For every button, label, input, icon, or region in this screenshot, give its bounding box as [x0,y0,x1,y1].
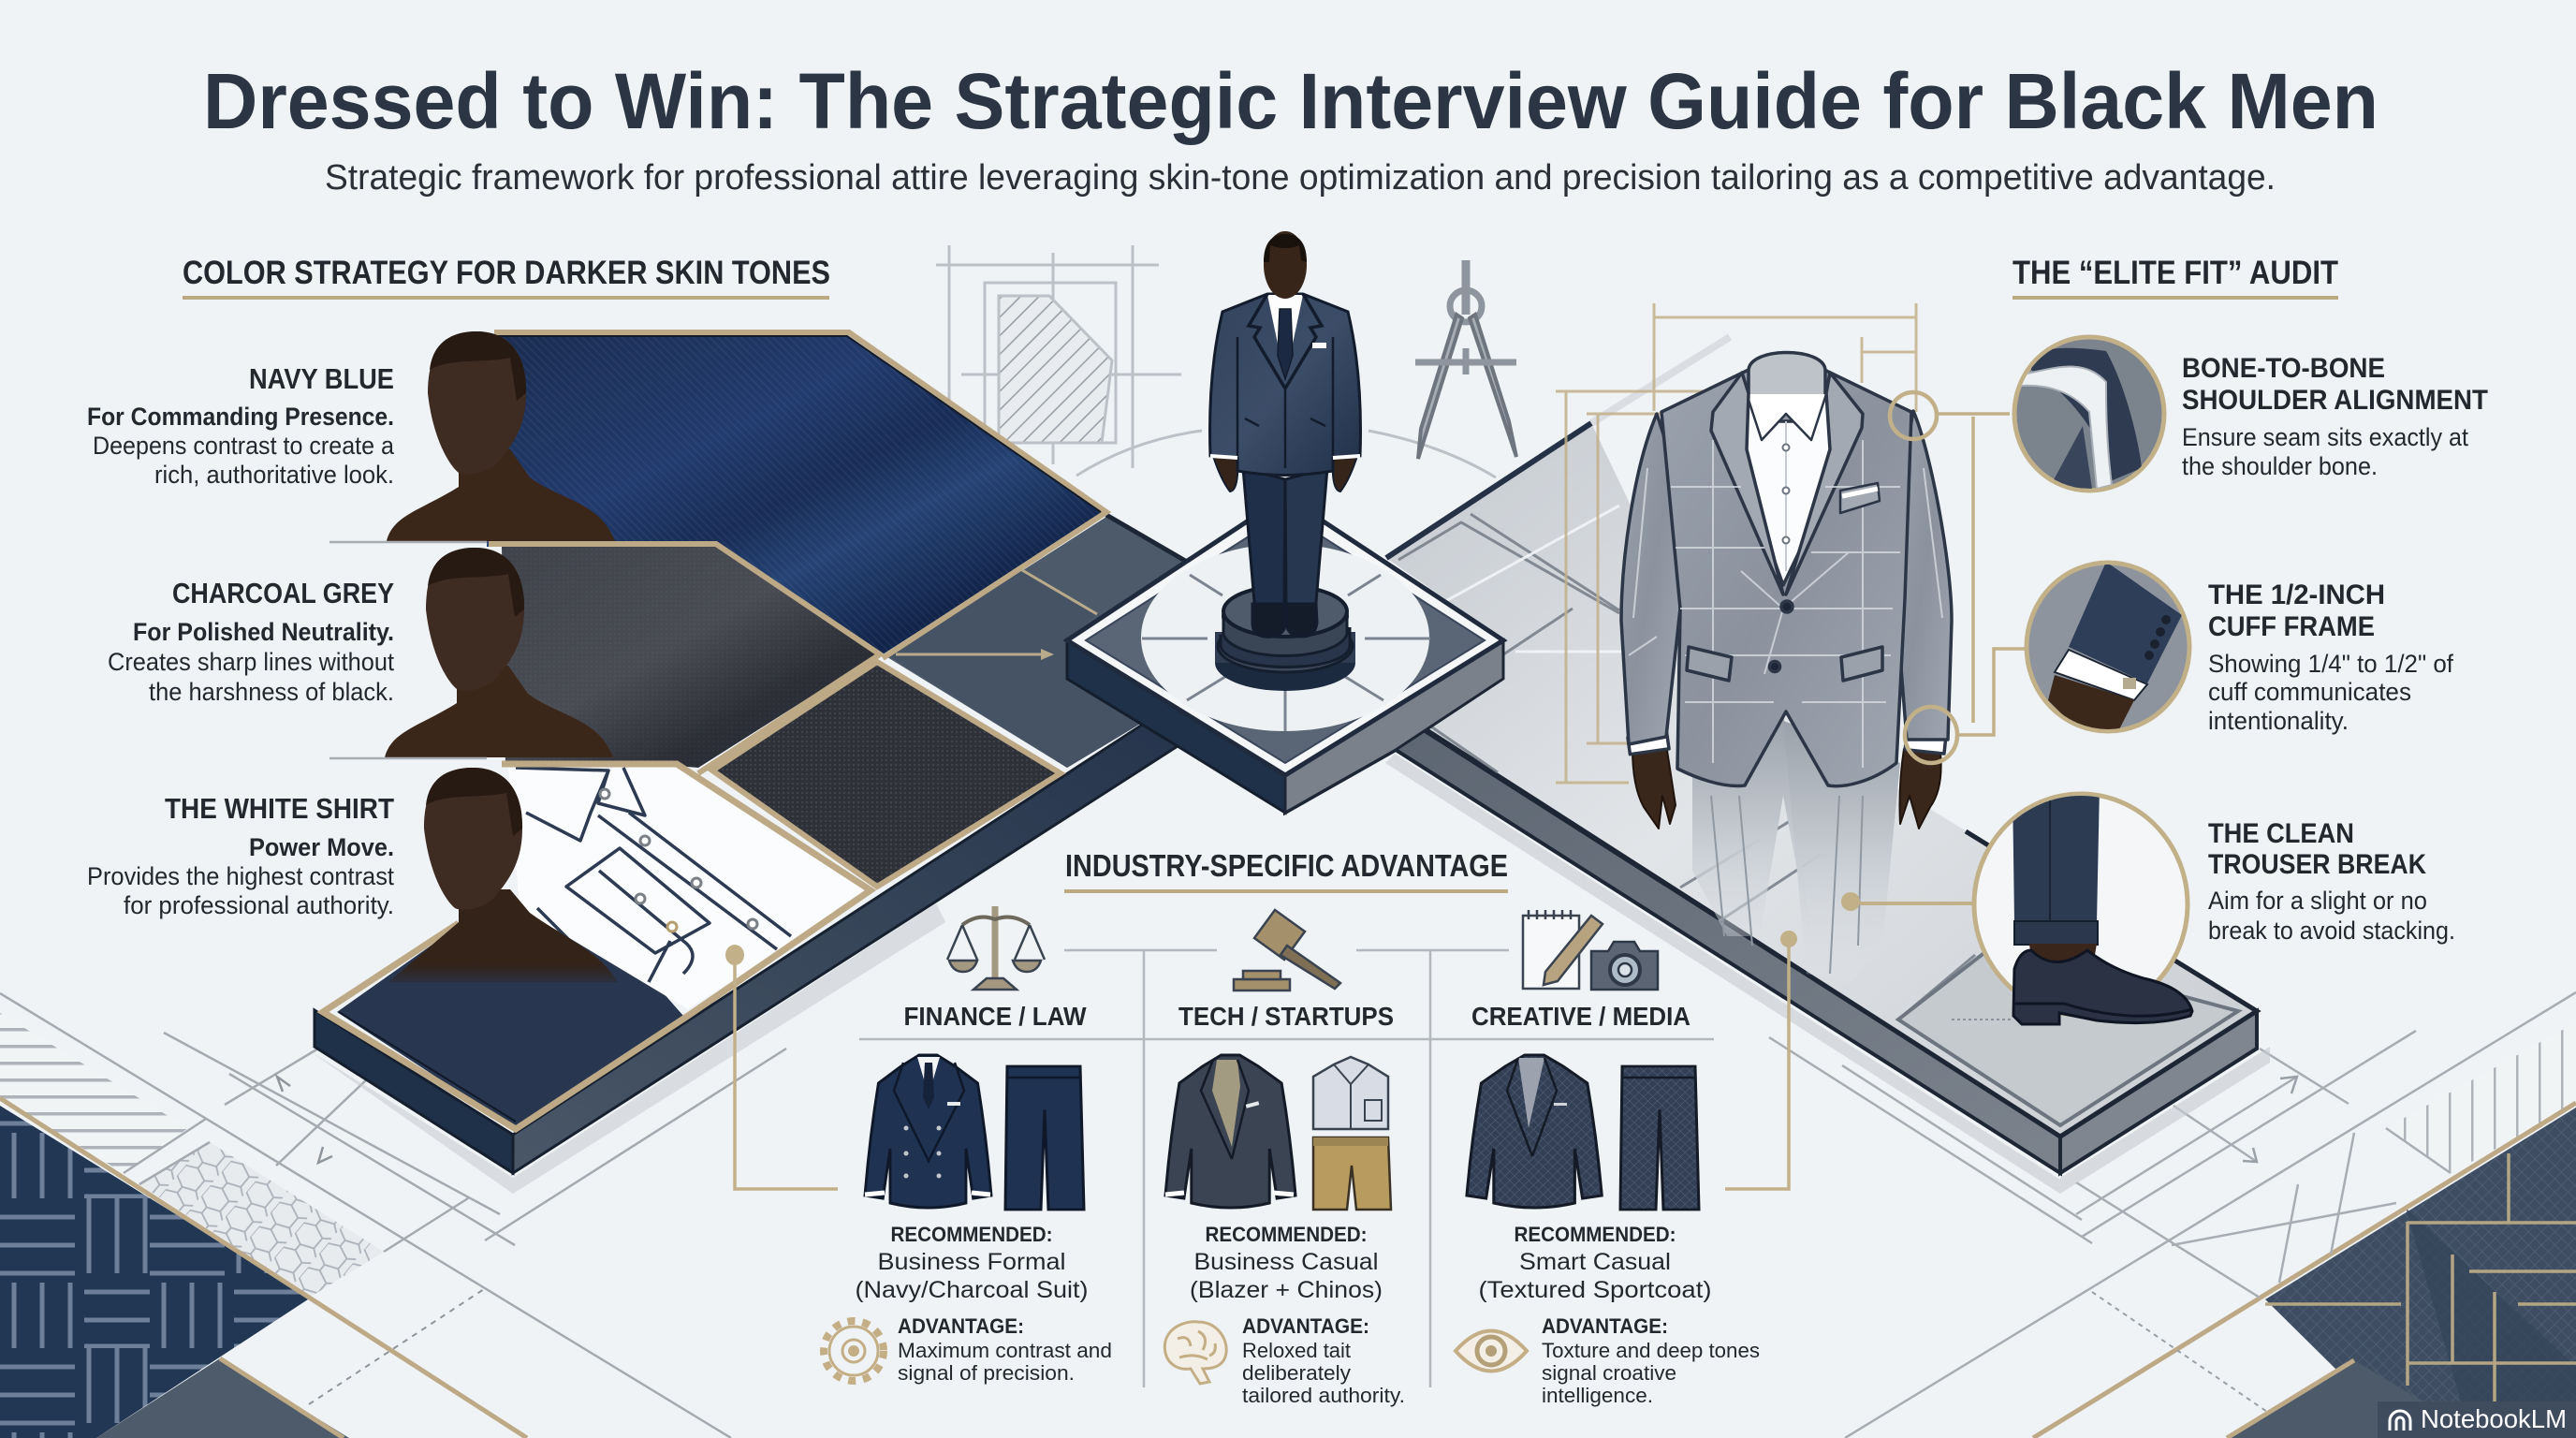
watermark: NotebookLM [2378,1401,2576,1438]
outfit: navy suit [865,1055,1084,1210]
text: recommended creative [1479,1223,1711,1303]
text: recommended tech [1190,1223,1383,1303]
label: finance / law: FINANCE / LAW [904,1002,1087,1031]
text: charcoal grey: the harshness of black. [149,678,394,706]
text: recommended tech: Business Casual [1194,1249,1378,1275]
heading: industry-specific advantage: INDUSTRY-SPECIFIC ADVANTAGE [1065,848,1508,883]
silhouette: charcoal grey [385,548,613,757]
text: advantage creative: Toxture and deep tones [1542,1339,1760,1362]
icon: drafting compass [1415,260,1516,459]
panel: slate tiles [887,517,1187,768]
torso [1661,370,1911,786]
gold dimension lines [1556,303,1916,783]
silhouette: navy blue [387,331,615,541]
silhouette: white shirt [388,768,618,982]
pedestal [1215,586,1355,691]
text: advantage creative: intelligence. [1542,1384,1653,1407]
title: Dressed to Win: The Strategic Interview Guide for Black Men [203,57,2378,145]
text: trouser break: THE CLEAN [2208,818,2354,849]
text: advantage tech [1242,1314,1405,1407]
platform: central pedestal diamond [1067,496,1503,813]
icon: scales [947,906,1045,990]
text: recommended finance [856,1223,1088,1303]
lapels [1711,373,1783,594]
text: advantage tech: deliberately [1242,1361,1352,1385]
text: recommended creative: RECOMMENDED: [1515,1223,1676,1246]
text: cuff frame: cuff communicates [2208,678,2411,706]
text: trouser break [2208,818,2455,945]
text: trouser break: break to avoid stacking. [2208,917,2455,945]
text: advantage creative: signal croative [1542,1361,1676,1385]
icon: eye [1456,1331,1527,1371]
connector: shirt to industry section [725,945,838,1189]
heading: elite fit audit: THE “ELITE FIT” AUDIT [2012,255,2338,291]
text: charcoal grey [108,577,394,706]
text: white shirt: for professional authority. [124,891,394,919]
text: cuff frame: THE 1/2-INCH [2208,580,2385,610]
icon: gear [824,1321,884,1381]
text: navy blue: Deepens contrast to create a [93,432,395,460]
text: white shirt: Power Move. [249,833,394,861]
decoration: bottom-right corner [1769,992,2576,1438]
text: recommended finance: Business Formal [878,1249,1065,1275]
text: advantage tech: ADVANTAGE: [1242,1314,1369,1338]
platform: right tailoring slab [1285,337,2270,1194]
callout: cuff frame [1905,562,2189,763]
text: cuff frame: CUFF FRAME [2208,611,2375,642]
figure: grey tailored jacket [1621,352,1952,983]
text: charcoal grey: CHARCOAL GREY [172,577,394,609]
text: recommended finance: RECOMMENDED: [891,1223,1052,1246]
text: cuff frame [2208,580,2453,735]
heading: color strategy: COLOR STRATEGY FOR DARKER SKIN TONES [183,255,830,291]
text: white shirt [87,792,394,919]
icon: camera [1591,942,1658,990]
pockets [1687,647,1732,681]
text: advantage finance: signal of precision. [898,1361,1075,1385]
heading: industry-specific advantage [1064,848,1508,893]
blueprint sketch [936,245,1496,477]
text: advantage tech: tailored authority. [1242,1384,1405,1407]
text: charcoal grey: Creates sharp lines without [108,648,394,676]
icon: brain [1164,1322,1226,1384]
text: charcoal grey: For Polished Neutrality. [133,618,394,646]
text: recommended creative: Smart Casual [1519,1249,1671,1275]
label: creative / media: CREATIVE / MEDIA [1471,1002,1690,1031]
panel: navy tile with silhouette base [337,899,683,1129]
text: recommended tech: RECOMMENDED: [1206,1223,1367,1246]
panel: charcoal fabric [502,547,877,768]
text: shoulder alignment: Ensure seam sits exactly at [2182,423,2468,451]
panel: white shirt fabric [508,768,871,1009]
connector: trousers to industry section [1725,931,1797,1189]
callout: shoulder alignment [1890,337,2164,723]
text: white shirt: THE WHITE SHIRT [165,792,394,825]
text: shoulder alignment: SHOULDER ALIGNMENT [2182,385,2488,416]
text: shoulder alignment [2182,353,2488,480]
table grid lines [859,950,1714,1387]
text: recommended tech: (Blazer + Chinos) [1190,1277,1383,1303]
pocket square [1840,483,1880,513]
platform: left color slab [309,332,1187,1194]
text: recommended finance: (Navy/Charcoal Suit) [856,1277,1088,1303]
text: cuff frame: intentionality. [2208,707,2349,735]
text: advantage finance: ADVANTAGE: [898,1314,1024,1338]
text: advantage creative: ADVANTAGE: [1542,1314,1668,1338]
text: shoulder alignment: BONE-TO-BONE [2182,353,2385,384]
hands [1632,744,1676,829]
shirt [1741,394,1839,585]
text: navy blue: rich, authoritative look. [154,461,394,489]
plaid [1629,440,1942,768]
text: navy blue: NAVY BLUE [249,362,394,395]
sleeves [1621,414,1680,744]
label: tech / startups: TECH / STARTUPS [1178,1002,1394,1031]
decoration: bottom-left corner [0,993,786,1438]
trousers [1692,712,1814,961]
callout: trouser break [1841,786,2192,1024]
text: recommended creative: (Textured Sportcoat) [1479,1277,1711,1303]
mannequin neck [1749,352,1825,412]
text: advantage tech: Reloxed tait [1242,1339,1352,1362]
icon: notepad and pencil [1523,910,1603,989]
panel: navy fabric [487,335,1105,654]
text: navy blue [87,362,395,489]
watermark: NotebookLM: NotebookLM [2421,1404,2567,1433]
figure: man in navy suit [1210,231,1360,637]
subtitle: Strategic framework for professional attire leveraging skin-tone optimization and precision tailoring as a competitive advantage. [325,158,2276,198]
text: advantage creative [1542,1314,1760,1407]
text: navy blue: For Commanding Presence. [87,403,394,431]
text: advantage finance [898,1314,1112,1385]
outfit: textured sportcoat [1467,1055,1699,1210]
text: advantage finance: Maximum contrast and [898,1339,1112,1362]
icon: gavel [1234,910,1340,990]
panel: charcoal swatch [712,662,1061,887]
text: trouser break: Aim for a slight or no [2208,887,2427,915]
text: cuff frame: Showing 1/4" to 1/2" of [2208,650,2453,678]
text: shoulder alignment: the shoulder bone. [2182,452,2378,480]
outfit: blazer and chinos [1165,1055,1391,1210]
text: trouser break: TROUSER BREAK [2208,849,2426,880]
text: white shirt: Provides the highest contrast [87,862,394,890]
